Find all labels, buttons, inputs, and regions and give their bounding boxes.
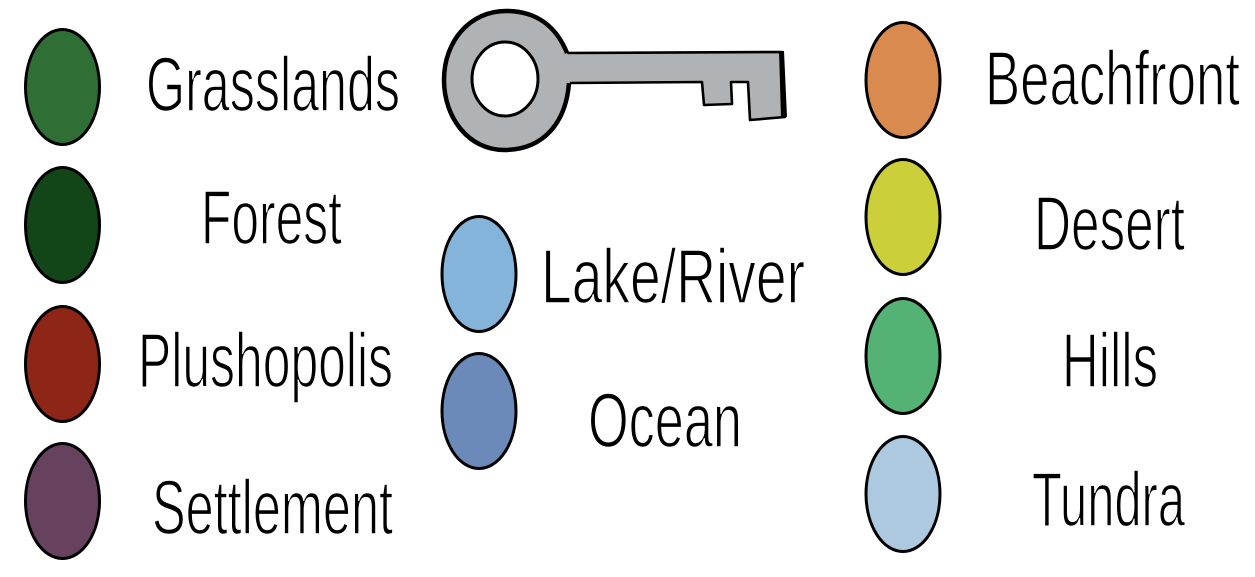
legend item: Forest: Forest <box>201 175 342 261</box>
legend item: Lake/River: Lake/River <box>541 234 805 320</box>
icon: key <box>442 10 787 152</box>
legend item: Tundra <box>866 436 1185 552</box>
legend item: Ocean: Ocean <box>588 378 742 464</box>
legend item: Forest <box>26 168 342 282</box>
legend item: Settlement: Settlement <box>152 465 393 551</box>
legend item: Grasslands: Grasslands <box>146 42 400 128</box>
legend item: Plushopolis: Plushopolis <box>138 318 393 404</box>
legend item: Ocean <box>442 354 742 468</box>
legend item: Desert <box>866 160 1185 274</box>
legend item: Plushopolis <box>26 306 393 422</box>
legend item: Settlement <box>26 444 393 558</box>
legend item: Lake/River <box>442 216 805 332</box>
legend item: Grasslands <box>26 30 400 144</box>
legend item: Beachfront <box>866 22 1240 138</box>
legend item: Hills <box>866 298 1158 414</box>
legend item: Hills: Hills <box>1062 318 1158 404</box>
legend item: Desert: Desert <box>1034 181 1185 267</box>
